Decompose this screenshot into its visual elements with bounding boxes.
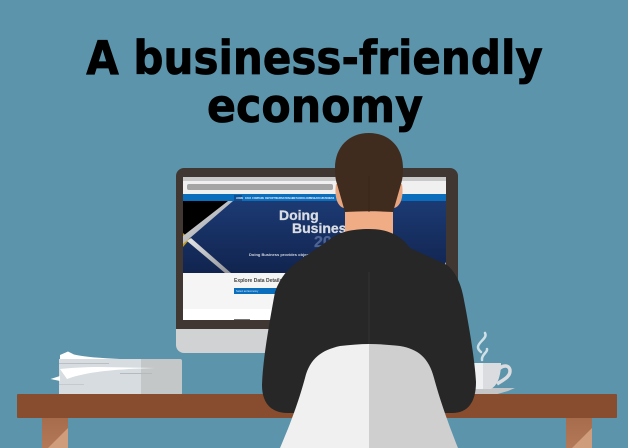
jacket — [262, 229, 476, 413]
navigation bar: METHODOLOGY — [292, 197, 311, 200]
banner heading: Doing — [279, 207, 319, 223]
banner heading: Business — [292, 220, 354, 236]
banner heading — [279, 207, 354, 251]
title — [86, 32, 543, 133]
banner subtext: Doing Business provides objective measures — [249, 252, 336, 257]
paper stack — [50, 352, 182, 395]
left ear — [335, 184, 346, 208]
right ear — [392, 184, 403, 208]
saucer — [470, 388, 515, 395]
hair — [335, 133, 403, 212]
title: A business-friendly — [86, 32, 543, 86]
banner heading: 2020 — [314, 234, 350, 251]
coffee cup — [470, 333, 515, 395]
monitor chin — [176, 325, 458, 353]
lower page panel: Select an Economy — [236, 289, 259, 293]
navigation bar: REPORTS — [265, 197, 277, 200]
neck — [345, 200, 393, 240]
hero banner — [183, 201, 446, 273]
navigation bar: BUSINESS — [322, 197, 335, 200]
navigation bar: HOME — [236, 197, 244, 200]
lower page panel — [183, 273, 446, 320]
chair — [280, 344, 458, 448]
screen — [183, 177, 446, 320]
monitor — [176, 168, 458, 353]
desk — [17, 394, 617, 448]
title: economy — [207, 79, 423, 133]
cup body — [470, 363, 501, 389]
right leg — [566, 418, 592, 448]
navigation bar: SUBNATIONAL — [276, 197, 294, 200]
person — [262, 133, 476, 413]
monitor bezel — [176, 168, 458, 329]
navigation bar: RESEARCH — [309, 197, 323, 200]
browser bar — [183, 177, 446, 194]
steam — [478, 333, 487, 360]
lower page panel: Explore Data Details — [234, 278, 283, 284]
left leg — [42, 418, 68, 448]
navigation bar: COMPARE — [252, 197, 264, 200]
navigation bar: DATA — [245, 197, 252, 200]
cup handle — [497, 366, 510, 384]
navigation bar — [183, 194, 446, 201]
